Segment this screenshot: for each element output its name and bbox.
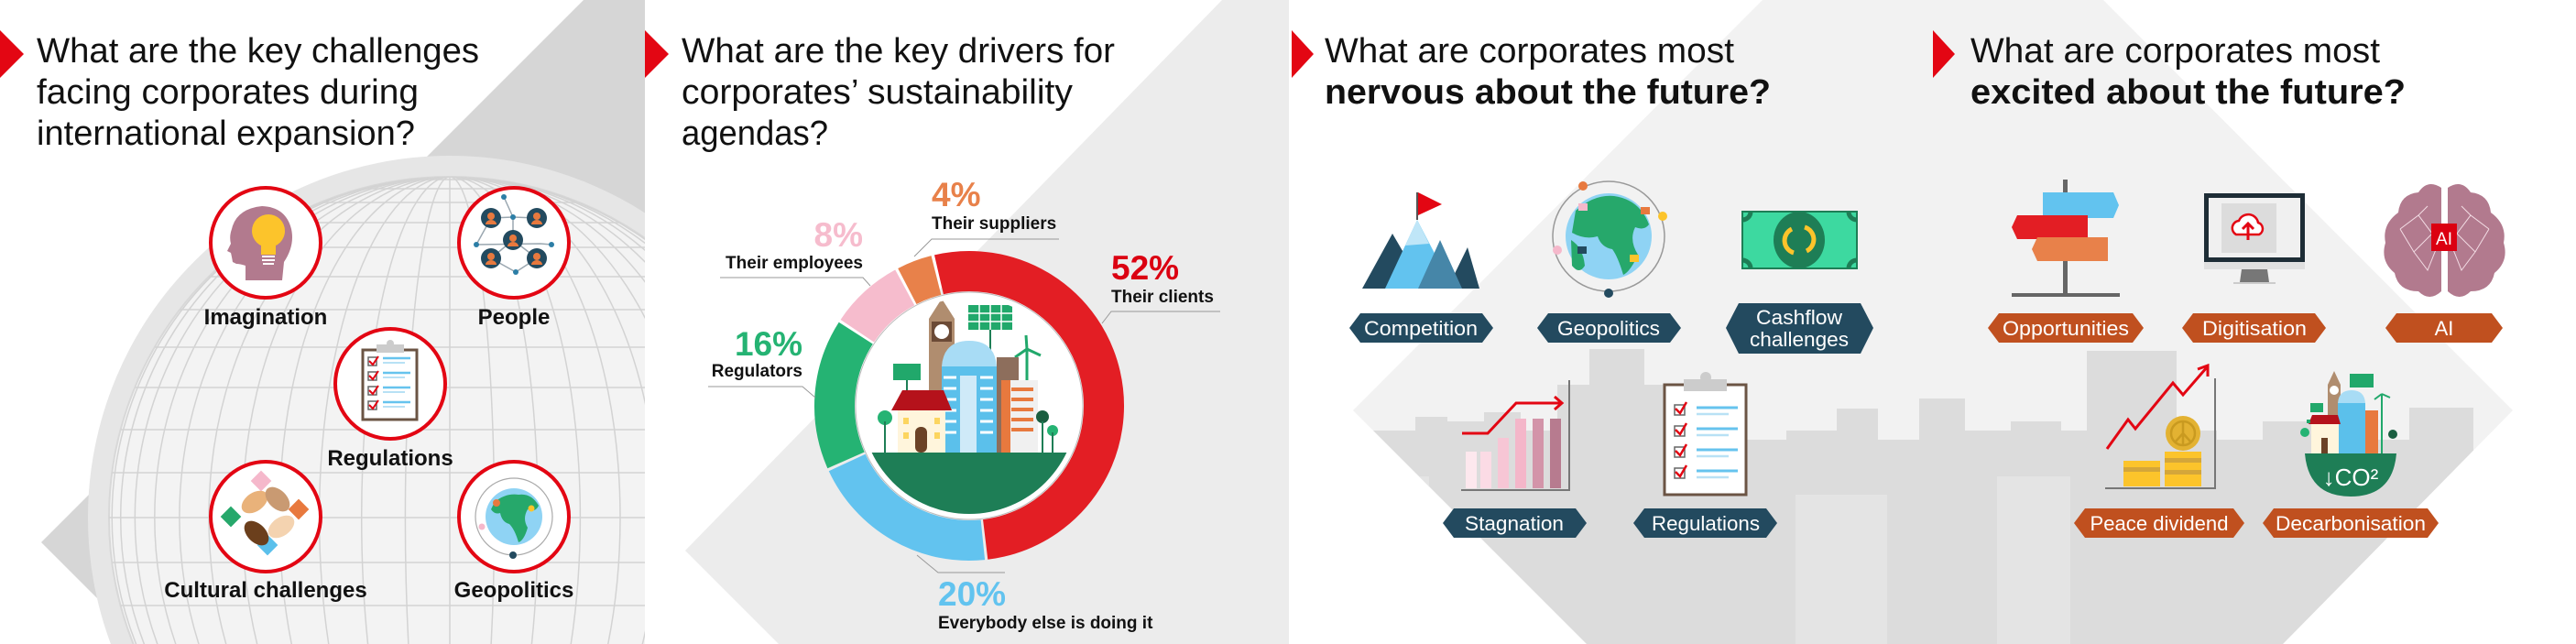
label: Imagination: Imagination [204, 305, 327, 330]
icon: mountain with flag [1362, 192, 1479, 289]
label: Regulations: Regulations [327, 446, 453, 471]
label: Geopolitics [1537, 313, 1681, 343]
panel: nervous / excited about the future [1292, 0, 2515, 644]
icon: people network [474, 194, 554, 275]
icon: banknote [1742, 212, 1857, 268]
background diamond [41, 0, 645, 644]
icon: hands [221, 471, 309, 555]
icon: signpost [2012, 180, 2120, 297]
icon: decarbonisation city [2300, 371, 2397, 497]
icon: AI brain: AI [2436, 230, 2452, 249]
label: Cashflow challenges: challenges [1750, 328, 1849, 351]
label: 16% regulators: Regulators [712, 362, 802, 381]
icon: decarbonisation city: ↓CO² [2323, 464, 2379, 491]
item: Regulations [335, 329, 445, 439]
label: 4% suppliers: Their suppliers [932, 214, 1056, 234]
label: Decarbonisation [2263, 508, 2439, 538]
label: Cashflow challenges [1726, 303, 1873, 354]
icon: globe with orbit [1553, 181, 1667, 298]
donut centre illustration: sustainable city [852, 292, 1090, 526]
label: 4% suppliers [932, 176, 1056, 234]
label: 16% regulators: 16% [735, 325, 802, 363]
icon: peace dividend chart [2105, 366, 2215, 488]
title: corporates’ sustainability [682, 73, 1073, 112]
label: 16% regulators [712, 325, 802, 381]
globe background [88, 156, 645, 644]
label: Stagnation [1443, 508, 1587, 538]
item: People [459, 188, 569, 298]
icon: head with bulb [227, 206, 292, 280]
title: facing corporates during [37, 73, 419, 112]
label: Cultural challenges: Cultural challenges [164, 578, 367, 603]
label: Competition: Competition [1364, 317, 1478, 340]
label: 52% clients: 52% [1111, 249, 1179, 287]
label: 20% everybody else [938, 575, 1153, 633]
icon: clipboard [1665, 372, 1746, 495]
item: Cultural challenges [211, 462, 321, 572]
title: international expansion? [37, 115, 415, 153]
label: Peace dividend: Peace dividend [2090, 512, 2228, 535]
label: AI [2385, 313, 2503, 343]
panel: international expansion challenges [0, 0, 645, 644]
title: excited [1933, 30, 2406, 112]
label: 8% employees [726, 216, 863, 273]
title: agendas? [682, 115, 828, 153]
label: Geopolitics: Geopolitics [454, 578, 573, 603]
title: excited: What are corporates most [1970, 32, 2380, 71]
title: excited: excited about the future? [1970, 73, 2406, 112]
label: 20% everybody else: Everybody else is doing it [938, 614, 1153, 633]
label: 20% everybody else: 20% [938, 575, 1006, 613]
label: People: People [478, 305, 550, 330]
label: 8% employees: Their employees [726, 254, 863, 273]
label: Opportunities: Opportunities [2003, 317, 2129, 340]
title: What are the key drivers for [682, 32, 1115, 71]
title: nervous [1292, 30, 1771, 112]
background diamond [685, 0, 1289, 644]
title: nervous: nervous about the future? [1325, 73, 1771, 112]
label: Digitisation [2182, 313, 2326, 343]
label: 8% employees: 8% [814, 216, 863, 254]
label: Regulations [1633, 508, 1777, 538]
donut chart [782, 219, 1156, 593]
label: Geopolitics: Geopolitics [1557, 317, 1660, 340]
icon: monitor with cloud upload [2204, 193, 2305, 284]
label: 52% clients: Their clients [1111, 288, 1214, 307]
icon: globe with orbit [475, 478, 552, 559]
leader lines [708, 239, 1220, 573]
hexagon background [1353, 0, 2513, 644]
title [645, 30, 1115, 153]
label: Stagnation: Stagnation [1465, 512, 1564, 535]
title [0, 30, 479, 153]
item: Geopolitics [459, 462, 569, 572]
title: What are the key challenges [37, 32, 479, 71]
label: Competition [1349, 313, 1493, 343]
item: Imagination [211, 188, 321, 298]
panel: sustainability drivers [645, 0, 1289, 644]
label: 4% suppliers: 4% [932, 176, 980, 213]
icon: clipboard [363, 340, 417, 420]
label: Digitisation: Digitisation [2202, 317, 2307, 340]
icon: stagnation chart [1461, 380, 1569, 490]
label: Peace dividend [2074, 508, 2244, 538]
label: Regulations: Regulations [1652, 512, 1760, 535]
label: AI: AI [2435, 317, 2453, 340]
label: Decarbonisation: Decarbonisation [2276, 512, 2426, 535]
label: Cashflow challenges: Cashflow [1756, 306, 1842, 329]
title: nervous: What are corporates most [1325, 32, 1734, 71]
icon: AI brain [2384, 184, 2505, 297]
label: 52% clients [1111, 249, 1214, 307]
city skyline [1356, 349, 2515, 644]
label: Opportunities [1988, 313, 2144, 343]
